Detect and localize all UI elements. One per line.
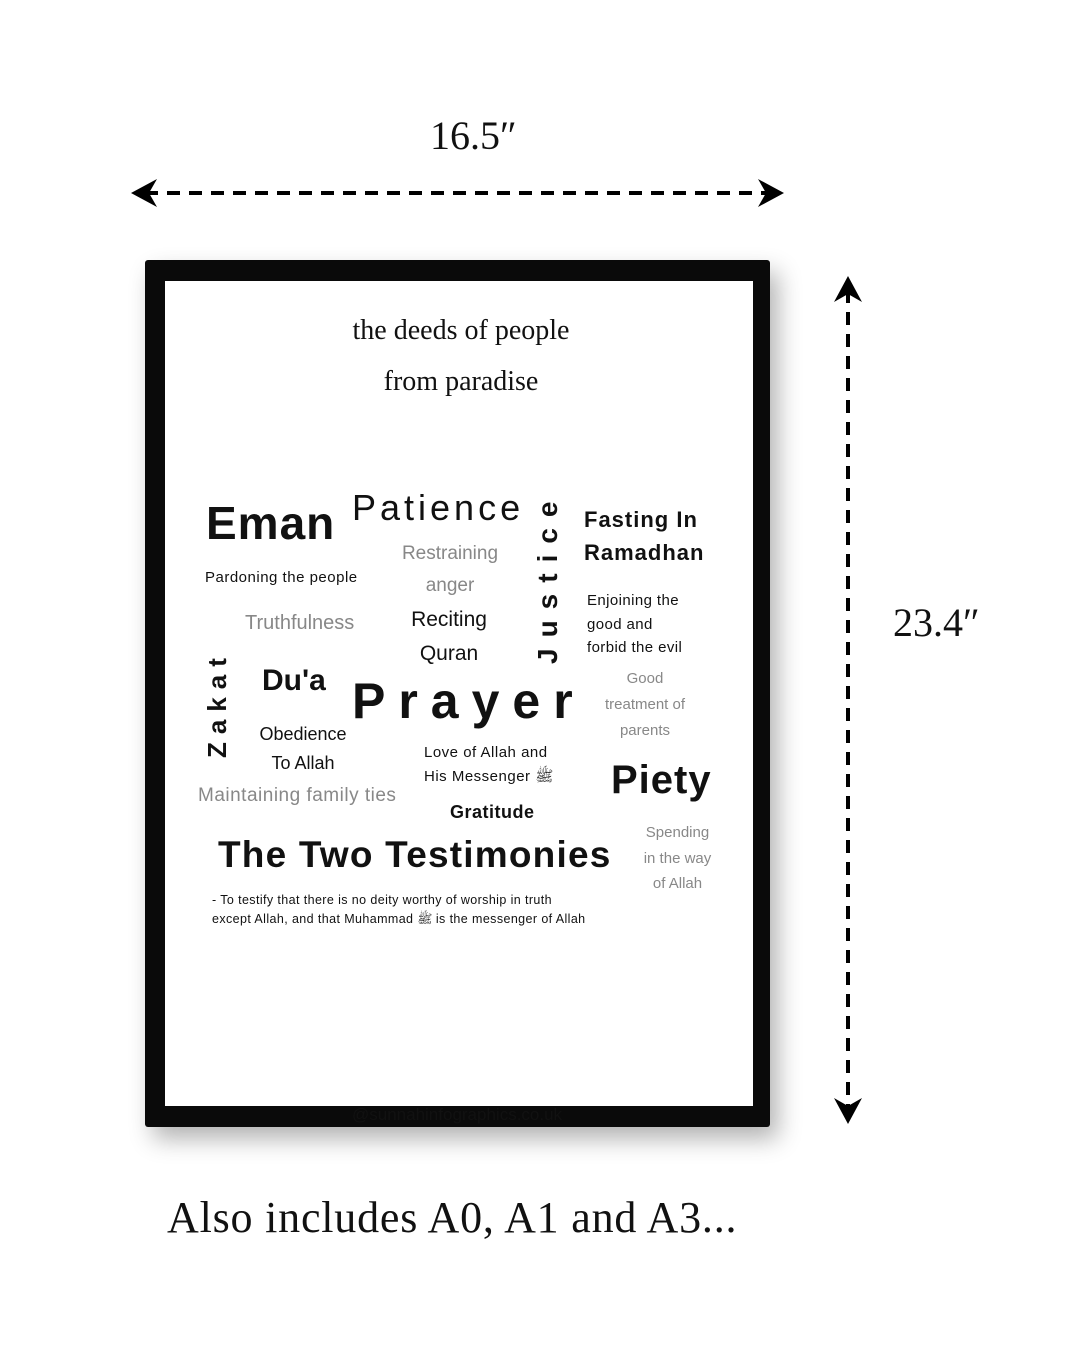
- Love of Allah: His Messenger ﷺ: [424, 768, 553, 785]
- Good treatment of parents: Good: [627, 670, 663, 687]
- Restraining anger: Restraining: [402, 543, 498, 564]
- testimony explanation: [212, 893, 586, 926]
- Spending in the way of Allah: of Allah: [653, 875, 702, 892]
- Gratitude: Gratitude: [450, 802, 535, 822]
- Spending in the way of Allah: [644, 824, 712, 892]
- The Two Testimonies: The Two Testimonies: [218, 834, 612, 875]
- Fasting in Ramadhan: [584, 507, 704, 565]
- arrow: width: [131, 179, 784, 207]
- Fasting in Ramadhan: Ramadhan: [584, 540, 704, 565]
- Good treatment of parents: parents: [620, 722, 670, 739]
- poster title: the deeds of people: [353, 315, 569, 346]
- Justice vertical: Justice: [532, 490, 563, 664]
- Love of Allah: Love of Allah and: [424, 744, 548, 761]
- Enjoining the good: forbid the evil: [587, 639, 682, 656]
- Restraining anger: anger: [426, 575, 474, 596]
- Maintaining family ties: Maintaining family ties: [198, 785, 396, 806]
- poster frame: [145, 260, 770, 1127]
- Reciting Quran: [411, 608, 487, 665]
- Reciting Quran: Reciting: [411, 608, 487, 631]
- poster title: [352, 315, 569, 397]
- Enjoining the good: [587, 592, 682, 656]
- Eman: Eman: [206, 497, 335, 549]
- Obedience to Allah: To Allah: [271, 753, 335, 773]
- height label: 23.4″: [893, 600, 980, 645]
- Reciting Quran: Quran: [420, 642, 478, 665]
- Zakat vertical: Zakat: [202, 650, 232, 758]
- Love of Allah: [424, 744, 553, 785]
- Good treatment of parents: treatment of: [605, 696, 685, 713]
- Fasting in Ramadhan: Fasting In: [584, 507, 698, 532]
- watermark: @sunnahinfographics.co.uk: [352, 1105, 562, 1124]
- Patience: Patience: [352, 487, 524, 528]
- Good treatment of parents: [605, 670, 686, 739]
- Enjoining the good: good and: [587, 616, 653, 632]
- Piety: Piety: [611, 758, 712, 802]
- Truthfulness: Truthfulness: [245, 612, 354, 634]
- testimony explanation: - To testify that there is no deity worthy of worship in truth: [212, 893, 552, 907]
- testimony explanation: except Allah, and that Muhammad ﷺ is the messenger of Allah: [212, 912, 586, 926]
- arrow: height: [834, 276, 862, 1124]
- Obedience to Allah: Obedience: [259, 724, 347, 744]
- footer caption: Also includes A0, A1 and A3...: [167, 1193, 737, 1242]
- Enjoining the good: Enjoining the: [587, 592, 679, 609]
- poster title: from paradise: [384, 366, 538, 397]
- Obedience to Allah: [259, 724, 347, 773]
- width label: 16.5″: [430, 113, 517, 158]
- Du'a: Du'a: [262, 664, 326, 697]
- Spending in the way of Allah: in the way: [644, 850, 711, 866]
- poster paper: [165, 281, 753, 1106]
- Spending in the way of Allah: Spending: [646, 824, 709, 841]
- Pardoning the people: Pardoning the people: [205, 569, 358, 586]
- Prayer: Prayer: [352, 673, 586, 729]
- Restraining anger: [402, 543, 498, 596]
